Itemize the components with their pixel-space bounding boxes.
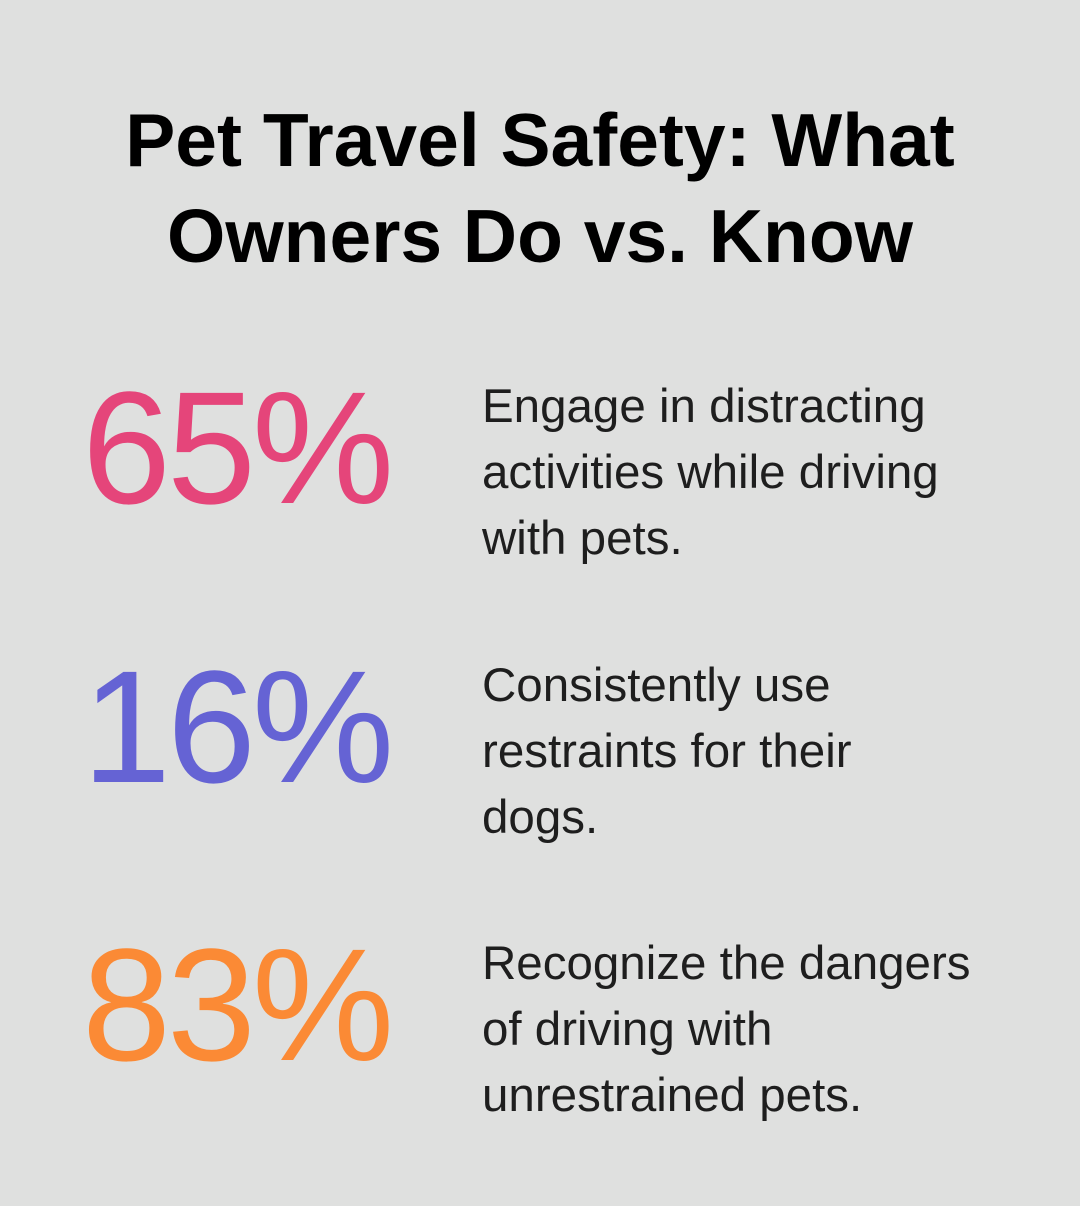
number 16%: 16% xyxy=(82,637,390,816)
number 83%: 83% xyxy=(82,915,390,1094)
title: Owners Do vs. Know xyxy=(167,194,913,278)
title xyxy=(125,98,955,278)
text 65%: activities while driving xyxy=(482,446,939,499)
text 83%: of driving with xyxy=(482,1003,772,1056)
text 16%: Consistently use xyxy=(482,659,831,712)
text 83%: unrestrained pets. xyxy=(482,1069,862,1122)
title: Pet Travel Safety: What xyxy=(125,98,955,182)
text 83% xyxy=(482,937,971,1122)
text 16%: restraints for their xyxy=(482,725,852,778)
stat row: 16% xyxy=(82,637,852,844)
text 16% xyxy=(482,659,852,844)
stat row: 65% xyxy=(82,358,939,565)
stat row: 83% xyxy=(82,915,971,1122)
text 65%: with pets. xyxy=(482,512,683,565)
text 65%: Engage in distracting xyxy=(482,380,926,433)
text 16%: dogs. xyxy=(482,791,598,844)
text 83%: Recognize the dangers xyxy=(482,937,971,990)
number 65%: 65% xyxy=(82,358,390,537)
text 65% xyxy=(482,380,939,565)
